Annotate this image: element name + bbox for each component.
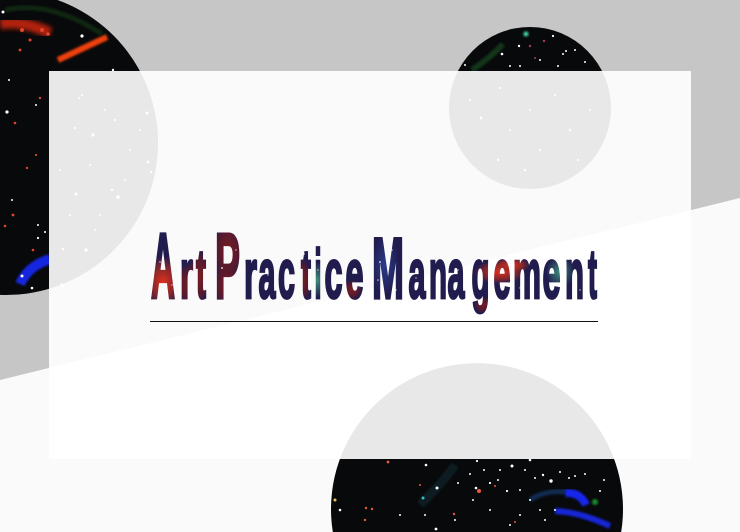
title: a xyxy=(448,235,465,313)
title: e xyxy=(346,235,364,313)
background: white angled lower field xyxy=(0,198,740,532)
title: m xyxy=(513,235,541,313)
title xyxy=(151,214,597,318)
title: n xyxy=(565,235,584,313)
title: e xyxy=(494,235,510,313)
title underline xyxy=(150,321,598,322)
title: r xyxy=(180,235,193,313)
title: c xyxy=(278,235,295,313)
circle: left space image xyxy=(0,0,158,295)
title: A xyxy=(151,214,175,318)
title: i xyxy=(314,235,322,313)
infographic canvas: t xyxy=(588,235,597,313)
title: g xyxy=(472,235,490,313)
title: t xyxy=(301,235,311,313)
title: n xyxy=(429,235,447,313)
title: t xyxy=(196,235,206,313)
title: r xyxy=(244,235,257,313)
title: a xyxy=(258,235,276,313)
title: c xyxy=(324,235,342,313)
title: M xyxy=(372,221,404,317)
circle: top right space image xyxy=(449,27,611,189)
title: e xyxy=(542,235,560,313)
title: a xyxy=(408,235,426,313)
title: P xyxy=(215,214,240,318)
circle: bottom space image xyxy=(331,363,623,532)
panel: translucent white card xyxy=(49,71,691,459)
